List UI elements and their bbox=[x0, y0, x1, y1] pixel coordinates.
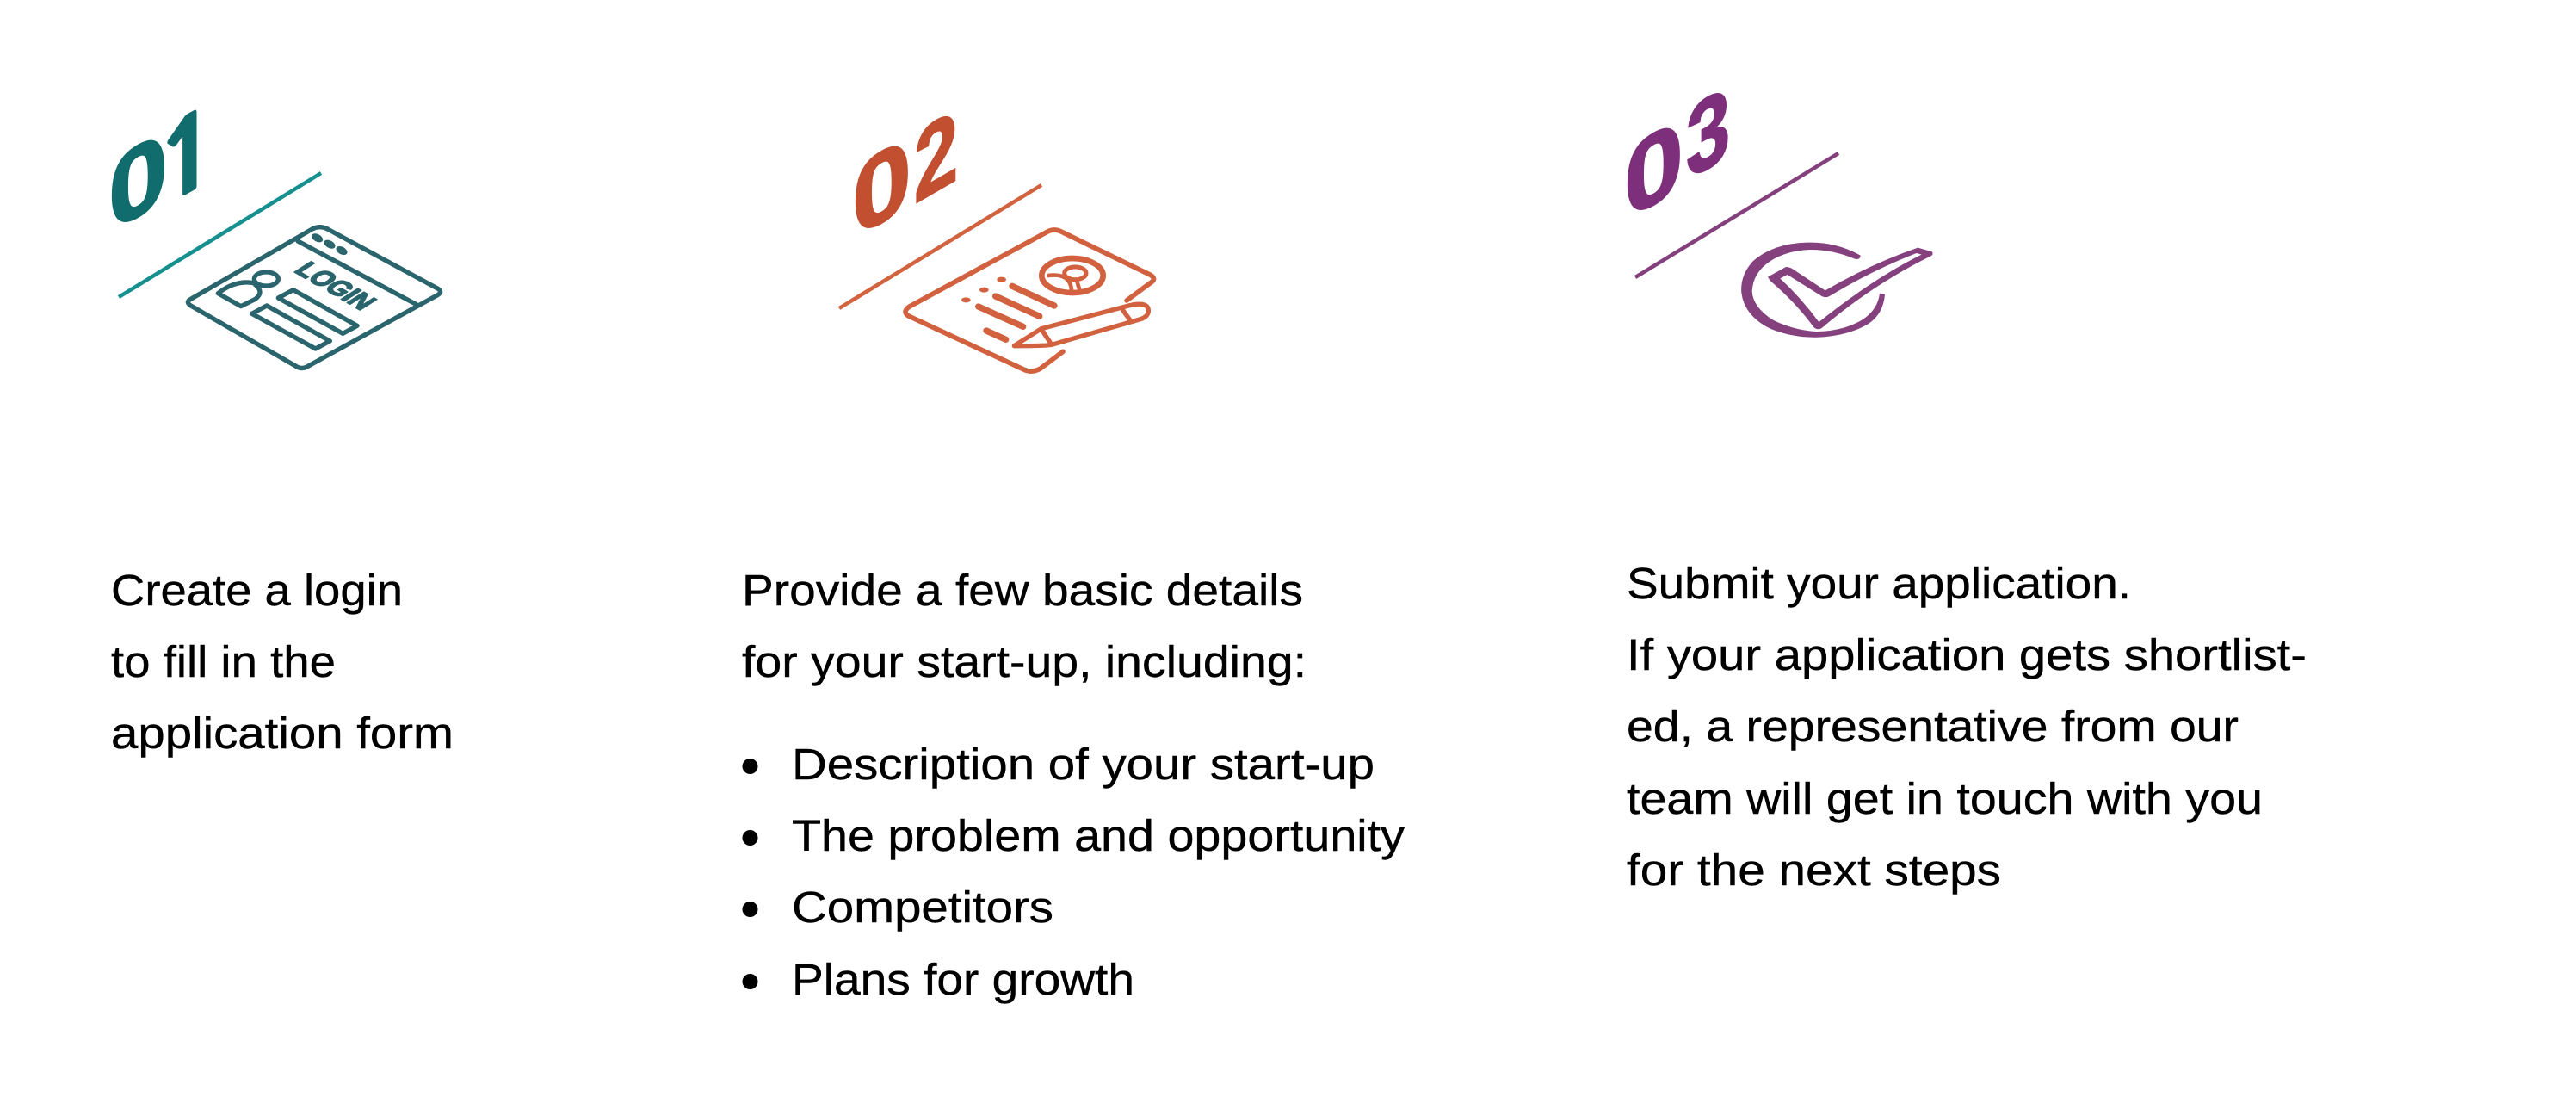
diagonal divider 1 bbox=[119, 173, 321, 297]
panel: step 1 bbox=[108, 90, 454, 758]
number 02 bbox=[852, 86, 958, 260]
text: step 1 description bbox=[111, 566, 454, 758]
number 03: 0 bbox=[1624, 96, 1683, 242]
icon: login window: LOGIN bbox=[288, 257, 384, 314]
list: step 2 items: Description of your start-up bbox=[792, 740, 1374, 789]
text: step 3 description: If your application gets shortlist- bbox=[1627, 630, 2307, 679]
number 02: 2 bbox=[914, 86, 958, 226]
number 01: 0 bbox=[108, 108, 168, 254]
text: step 2 intro: Provide a few basic details bbox=[742, 566, 1303, 615]
text: step 3 description: ed, a representative from our bbox=[1627, 702, 2239, 751]
number 03: 3 bbox=[1686, 64, 1730, 201]
text: step 3 description bbox=[1627, 559, 2307, 895]
number 01: 1 bbox=[155, 90, 219, 226]
text: step 3 description: Submit your application. bbox=[1627, 559, 2131, 608]
icon: check mark in circle bbox=[1741, 243, 1933, 338]
text: step 3 description: team will get in touch with you bbox=[1627, 774, 2263, 823]
text: step 1 description: application form bbox=[111, 709, 454, 758]
icon: form with pencil bbox=[905, 230, 1153, 371]
panel: step 3 bbox=[1624, 64, 2307, 895]
icon: login window bbox=[188, 227, 441, 368]
diagonal divider 2 bbox=[839, 185, 1041, 308]
diagonal divider 3 bbox=[1635, 153, 1838, 277]
number 03 bbox=[1624, 64, 1730, 242]
list: step 2 items: Competitors bbox=[792, 883, 1053, 932]
number 01 bbox=[108, 90, 219, 254]
list: step 2 items: Plans for growth bbox=[792, 955, 1134, 1004]
number 02: 0 bbox=[852, 114, 911, 260]
panel: step 2 bbox=[742, 86, 1405, 1004]
text: step 3 description: for the next steps bbox=[1627, 846, 2001, 895]
list: step 2 items: The problem and opportunity bbox=[792, 811, 1405, 860]
text: step 1 description: Create a login bbox=[111, 566, 403, 615]
list: step 2 items bbox=[742, 740, 1405, 1004]
text: step 2 intro: for your start-up, including: bbox=[742, 637, 1307, 686]
text: step 1 description: to fill in the bbox=[111, 637, 336, 686]
text: step 2 intro bbox=[742, 566, 1307, 686]
